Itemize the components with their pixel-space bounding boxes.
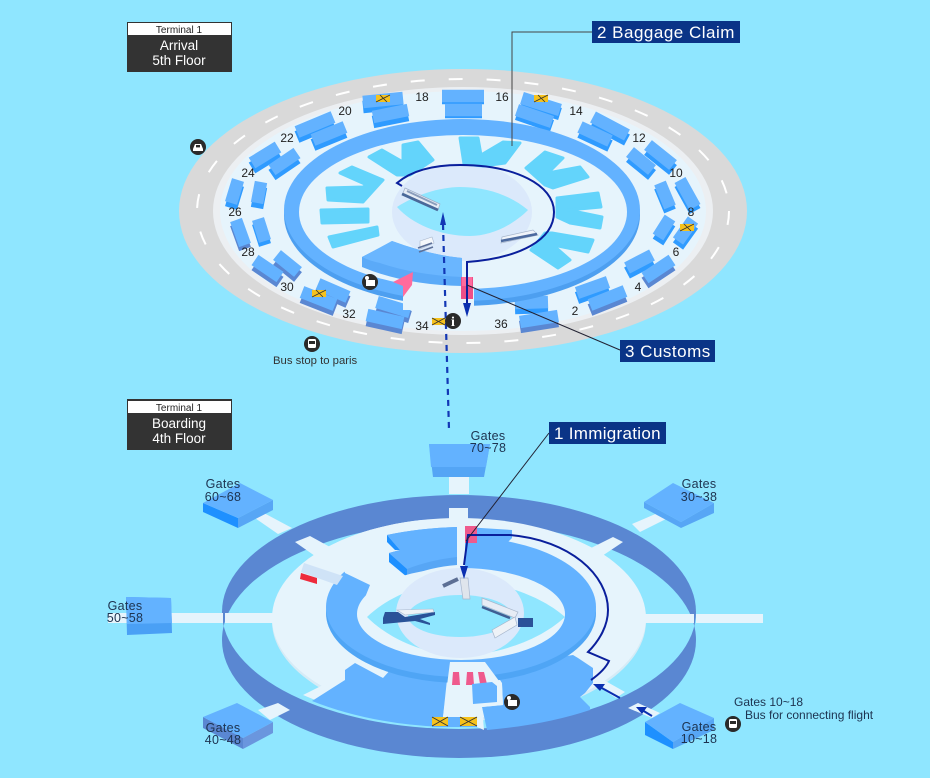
title: boarding [127, 399, 232, 450]
gates 40-48: 40~48 [205, 733, 241, 747]
gates 30-38 [644, 477, 717, 528]
title: arrival: Terminal 1 [156, 25, 202, 36]
route: baggage claim to customs [397, 165, 554, 317]
gates 70-78 [429, 429, 506, 477]
gates 10-18 [645, 703, 717, 749]
gate buildings 18 [363, 98, 408, 122]
pink exit [393, 272, 413, 297]
gate buildings 36 [515, 302, 558, 327]
central well [392, 163, 532, 261]
gate buildings 20 [297, 117, 345, 145]
gate buildings 4 [627, 255, 672, 283]
gate buildings 28 [255, 255, 298, 282]
bus stop label: Bus stop to paris [273, 355, 357, 367]
title: boarding: Boarding [152, 416, 206, 431]
gate numbers [228, 90, 695, 333]
icon: information: i [451, 315, 455, 330]
bottom left hall [312, 663, 448, 727]
title: arrival [127, 22, 232, 72]
gate buildings 32 [367, 302, 410, 328]
gate numbers: 12 [632, 131, 646, 145]
gates 50-58: Gates [108, 599, 142, 613]
baggage belts [321, 138, 602, 268]
gates 10-18: 10~18 [681, 732, 717, 746]
gate buildings 14 [580, 117, 627, 146]
gate numbers: 24 [241, 166, 255, 180]
arrow into terminal [593, 684, 620, 698]
gates 10-18: Gates [682, 720, 716, 734]
inner well [357, 568, 565, 660]
gates 10-18 bus note [734, 695, 874, 722]
gate numbers: 34 [415, 319, 429, 333]
gate buildings 24 [231, 180, 261, 208]
gate numbers: 22 [280, 131, 294, 145]
gates 10-18 bus note: Bus for connecting flight [745, 708, 874, 722]
gate buildings 30 [302, 284, 348, 310]
road ring [179, 69, 747, 353]
gates 60-68 [203, 477, 273, 528]
gate numbers: 32 [342, 307, 356, 321]
title: boarding: Terminal 1 [156, 403, 202, 414]
gate numbers: 30 [280, 280, 294, 294]
gates 10-18 bus note: Gates 10~18 [734, 695, 803, 709]
arrival block [362, 241, 462, 286]
outer wall ring [222, 495, 696, 758]
gate buildings 16 [517, 98, 560, 126]
terminal ring [284, 119, 640, 310]
callout: customs [467, 285, 715, 362]
callout: immigration [466, 422, 666, 541]
callout: customs: 3 Customs [625, 342, 711, 361]
gate buildings 12 [630, 145, 673, 175]
arrival floor map [179, 69, 747, 430]
yellow markers [312, 95, 694, 325]
escalators [383, 578, 533, 638]
gate numbers: 26 [228, 205, 242, 219]
gate numbers: 14 [569, 104, 583, 118]
gate numbers: 6 [673, 245, 680, 259]
callout: baggage claim [512, 21, 740, 146]
arrow in corridor [636, 707, 652, 716]
gate numbers: 2 [572, 304, 579, 318]
gate buildings 26 [236, 219, 265, 249]
gates 50-58 [107, 597, 172, 635]
small block [472, 682, 497, 704]
gate buildings centre top [442, 96, 484, 112]
gate buildings 22 [252, 147, 297, 175]
gate numbers: 20 [338, 104, 352, 118]
central corridor [442, 662, 503, 730]
security strip [432, 717, 477, 727]
gate buildings 6 [658, 218, 693, 246]
boarding floor map [108, 475, 763, 758]
corridors [108, 475, 763, 720]
title: arrival: 5th Floor [152, 53, 206, 68]
terminal inner ring [326, 520, 596, 683]
gates 60-68: Gates [206, 477, 240, 491]
pink counters [452, 672, 487, 685]
gates 40-48 [203, 703, 273, 749]
callout: immigration: 1 Immigration [554, 424, 661, 443]
icon: baggage [362, 274, 378, 290]
icon: baggage lower [504, 694, 520, 710]
bottom right hall [482, 655, 593, 730]
gates 70-78: 70~78 [470, 441, 506, 455]
gates 70-78: Gates [471, 429, 505, 443]
gates 30-38: 30~38 [681, 490, 717, 504]
gate numbers: 4 [635, 280, 642, 294]
upper-left gate hall [387, 527, 457, 577]
icon: bus stop [304, 336, 320, 352]
gate numbers: 8 [688, 205, 695, 219]
title: boarding: 4th Floor [152, 431, 206, 446]
icon: connecting bus [725, 716, 741, 732]
gates 60-68: 60~68 [205, 490, 241, 504]
gate numbers: 36 [494, 317, 508, 331]
gate numbers: 18 [415, 90, 429, 104]
gate buildings 10 [660, 180, 695, 211]
icon: taxi [190, 139, 206, 155]
floor [272, 518, 646, 721]
title: arrival: Arrival [160, 38, 198, 53]
gate numbers: 28 [241, 245, 255, 259]
gate numbers: 16 [495, 90, 509, 104]
customs pink [461, 277, 473, 299]
red marker [300, 563, 343, 585]
immigration pink [465, 526, 477, 543]
dashed connection [440, 212, 449, 430]
gate numbers: 10 [669, 166, 683, 180]
gate buildings 2 [577, 282, 625, 310]
gates 50-58: 50~58 [107, 611, 143, 625]
route: gates to immigration [460, 535, 609, 680]
gates 30-38: Gates [682, 477, 716, 491]
icon: information [445, 313, 461, 330]
gates 40-48: Gates [206, 721, 240, 735]
callout: baggage claim: 2 Baggage Claim [597, 23, 735, 42]
escalators [402, 188, 538, 252]
